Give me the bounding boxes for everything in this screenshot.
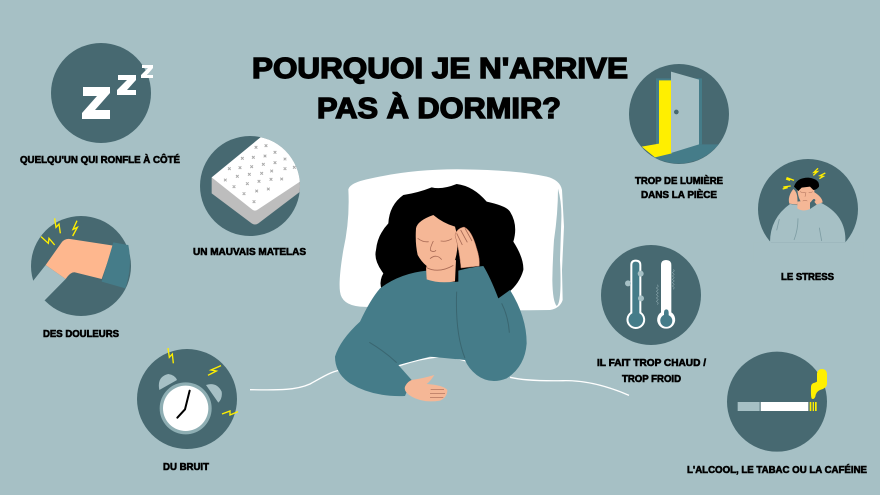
pillow <box>340 169 564 310</box>
panel: stress <box>753 159 863 283</box>
icon: door <box>656 78 702 144</box>
label <box>597 358 706 385</box>
central illustration: woman in bed <box>250 169 629 401</box>
sweater body <box>335 266 527 396</box>
icon: lightning bolts <box>783 168 825 189</box>
icon: stressed person <box>770 202 845 242</box>
icon: alarm clock <box>159 374 222 403</box>
label: DES DOULEURS <box>43 329 119 340</box>
title: PAS À DORMIR? <box>317 91 561 125</box>
title: POURQUOI JE N'ARRIVE <box>252 53 628 85</box>
neck and face <box>426 260 456 282</box>
icon: hot thermometer <box>658 261 674 328</box>
label: QUELQU'UN QUI RONFLE À CÔTÉ <box>20 153 180 166</box>
hand on temple <box>455 227 479 268</box>
panel: mattress <box>193 135 306 258</box>
icon: cigarette <box>738 402 760 411</box>
label: LE STRESS <box>781 272 834 283</box>
panel: light <box>629 64 729 201</box>
icon: arm <box>46 239 113 279</box>
icon: lightning bolts <box>41 218 77 245</box>
panel: pain <box>28 216 131 340</box>
panel: noise <box>137 348 238 473</box>
panel: tobacco <box>687 352 867 476</box>
label: L'ALCOOL, LE TABAC OU LA CAFÉINE <box>687 463 867 476</box>
sweater folds <box>369 292 509 363</box>
icon: Z letters <box>82 65 153 119</box>
facial features <box>418 238 453 270</box>
label <box>635 174 723 201</box>
panel: snoring <box>20 43 180 166</box>
label: DU BRUIT <box>163 462 209 473</box>
icon: lightning bolts <box>168 348 238 415</box>
lower hand <box>405 375 447 401</box>
label: DANS LA PIÈCE <box>641 188 717 201</box>
label: TROP FROID <box>622 374 681 385</box>
icon: cold thermometer <box>627 261 644 328</box>
hair <box>375 184 523 300</box>
icon: mattress <box>212 135 305 224</box>
blanket line <box>250 357 629 395</box>
icon: smoke <box>811 369 827 399</box>
label: IL FAIT TROP CHAUD / <box>597 358 706 369</box>
label: TROP DE LUMIÈRE <box>635 174 723 187</box>
title <box>252 53 628 125</box>
label: UN MAUVAIS MATELAS <box>193 247 306 258</box>
panel: temperature <box>597 245 706 385</box>
pillow seam <box>552 189 561 306</box>
